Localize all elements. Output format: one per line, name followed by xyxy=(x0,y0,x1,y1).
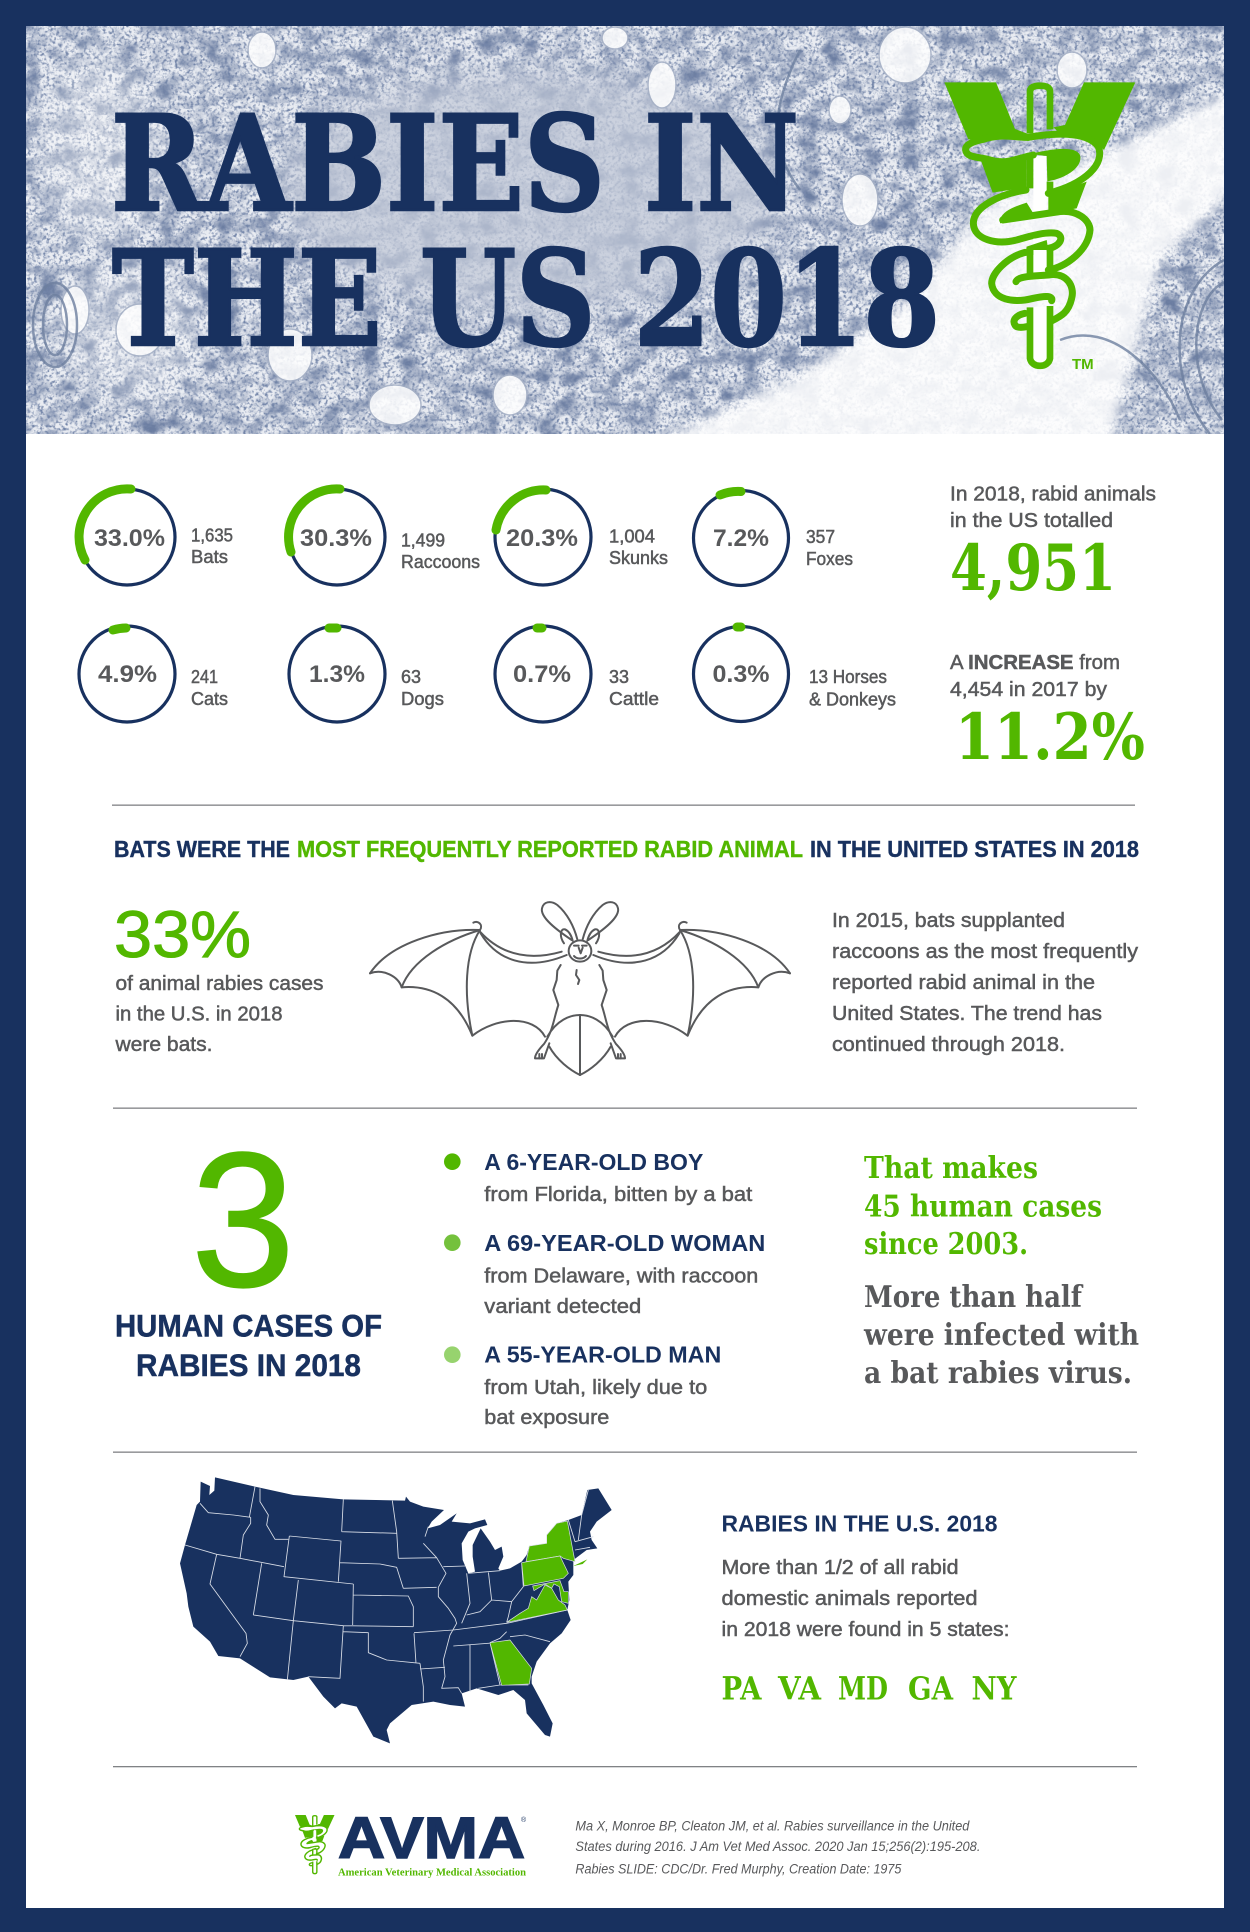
heading: bats most frequently reported: IN THE UNITED STATES IN 2018 xyxy=(810,836,1139,862)
case: 55-year-old man xyxy=(444,1342,721,1429)
stat: increase from 2017 xyxy=(950,651,1145,775)
chart: foxes donut: Foxes xyxy=(806,549,853,569)
stat: total rabid animals: In 2018, rabid animals xyxy=(950,482,1156,506)
list: human cases xyxy=(444,1149,765,1429)
chart: skunks donut: 20.3% xyxy=(506,525,578,552)
title xyxy=(111,87,940,377)
case: 6-year-old boy: from Florida, bitten by a bat xyxy=(484,1183,753,1206)
case: 55-year-old man: from Utah, likely due to xyxy=(484,1376,707,1399)
chart: raccoons donut: 1,499 xyxy=(401,530,445,550)
text: bats supplanted raccoons xyxy=(832,909,1139,1056)
highlighted state: Virginia xyxy=(507,1585,567,1622)
stat: increase from 2017: 4,454 in 2017 by xyxy=(950,678,1108,701)
text: more than half bat virus: were infected with xyxy=(863,1318,1139,1353)
text: bats supplanted raccoons: continued through 2018. xyxy=(832,1033,1065,1056)
case: 55-year-old man: bat exposure xyxy=(484,1406,609,1429)
text: 45 human cases since 2003 xyxy=(864,1151,1102,1262)
stat: 3 human cases: HUMAN CASES OF xyxy=(115,1308,382,1344)
text: bats supplanted raccoons: raccoons as the most frequently xyxy=(832,940,1139,963)
highlighted state: Pennsylvania xyxy=(522,1556,568,1586)
list: five state abbreviations: GA xyxy=(908,1669,954,1707)
text: domestic animals in 5 states: More than 1/2 of all rabid xyxy=(722,1556,958,1579)
panel: header micrograph background xyxy=(26,26,1235,445)
chart: horses and donkeys donut: & Donkeys xyxy=(809,690,896,710)
highlighted state: Georgia xyxy=(490,1640,532,1685)
text: domestic animals in 5 states xyxy=(722,1556,1010,1641)
chart: raccoons donut xyxy=(289,489,480,585)
chart: dogs donut: 63 xyxy=(401,667,421,687)
stat: increase from 2017: 11.2% xyxy=(955,700,1145,775)
highlighted state: New York xyxy=(526,1521,575,1562)
case: 69-year-old woman: variant detected xyxy=(484,1295,641,1318)
chart: dogs donut: 1.3% xyxy=(309,661,365,688)
stat: 3 human cases: 3 xyxy=(191,1112,295,1327)
chart: foxes donut: 357 xyxy=(806,527,835,547)
text: 45 human cases since 2003: 45 human cases xyxy=(864,1190,1102,1224)
highlighted state: Long Island xyxy=(573,1559,587,1566)
stat: 33 percent of cases: 33% xyxy=(114,897,251,971)
text: references: States during 2016. J Am Vet Med Assoc. 2020 Jan 15;256(2):195-208. xyxy=(575,1839,980,1854)
chart: skunks donut: 1,004 xyxy=(609,526,655,546)
text: domestic animals in 5 states: domestic animals reported xyxy=(722,1587,978,1610)
logo: AVMA: American Veterinary Medical Association xyxy=(338,1868,526,1878)
chart: dogs donut: Dogs xyxy=(401,689,444,709)
chart: foxes donut: 7.2% xyxy=(713,525,769,552)
chart: cats donut: 241 xyxy=(191,667,218,687)
chart: cats donut: 4.9% xyxy=(98,661,157,688)
case: 69-year-old woman xyxy=(444,1230,765,1318)
text: bats supplanted raccoons: United States. The trend has xyxy=(832,1002,1102,1025)
stat: increase from 2017: A INCREASE from xyxy=(950,651,1120,674)
stat: total rabid animals: in the US totalled xyxy=(950,509,1113,532)
stat: total rabid animals: 4,951 xyxy=(950,531,1116,606)
stat: 33 percent of cases xyxy=(114,897,324,1056)
case: 69-year-old woman: from Delaware, with raccoon xyxy=(484,1264,758,1288)
heading: bats most frequently reported xyxy=(114,836,1139,862)
stat: 33 percent of cases: were bats. xyxy=(114,1033,212,1056)
text: references: Rabies SLIDE: CDC/Dr. Fred Murphy, Creation Date: 1975 xyxy=(575,1861,902,1876)
text: references xyxy=(575,1819,980,1876)
chart: cats donut xyxy=(79,626,228,722)
chart: bats donut: 1,635 xyxy=(191,526,233,546)
title: RABIES IN xyxy=(111,87,799,242)
chart: skunks donut: Skunks xyxy=(609,548,668,568)
highlighted state: Maryland xyxy=(533,1581,568,1603)
chart: bats donut: Bats xyxy=(191,547,228,567)
chart: dogs donut xyxy=(289,626,444,722)
chart: horses and donkeys donut xyxy=(694,626,896,722)
stat: 33 percent of cases: of animal rabies cases xyxy=(116,972,324,995)
chart: cattle donut: 0.7% xyxy=(513,661,571,688)
list: five state abbreviations: PA xyxy=(722,1669,763,1707)
chart: cattle donut: Cattle xyxy=(609,689,659,709)
text: more than half bat virus xyxy=(863,1280,1139,1391)
case: 6-year-old boy: A 6-YEAR-OLD BOY xyxy=(484,1149,703,1175)
text: more than half bat virus: a bat rabies virus. xyxy=(864,1356,1132,1391)
trademark mark: TM xyxy=(1072,356,1094,373)
logo: AVMA: AVMA xyxy=(338,1806,525,1871)
chart: raccoons donut: Raccoons xyxy=(401,552,480,572)
text: domestic animals in 5 states: in 2018 were found in 5 states: xyxy=(722,1618,1010,1641)
chart: horses and donkeys donut: 0.3% xyxy=(712,661,770,688)
chart: foxes donut xyxy=(694,490,853,586)
chart: raccoons donut: 30.3% xyxy=(300,525,372,552)
heading: bats most frequently reported: MOST FREQUENTLY REPORTED RABID ANIMAL xyxy=(297,836,803,862)
icon: AVMA green V with staff and serpent xyxy=(944,82,1135,366)
text: more than half bat virus: More than half xyxy=(864,1280,1084,1315)
chart: cattle donut: 33 xyxy=(609,667,629,687)
list: five state abbreviations xyxy=(722,1669,1017,1707)
stat: total rabid animals xyxy=(950,482,1156,606)
chart: cats donut: Cats xyxy=(191,689,228,709)
title: THE US 2018 xyxy=(112,222,940,377)
stat: 33 percent of cases: in the U.S. in 2018 xyxy=(116,1002,282,1026)
chart: skunks donut xyxy=(495,489,668,585)
heading: bats most frequently reported: BATS WERE THE xyxy=(114,836,290,862)
text: 45 human cases since 2003: since 2003. xyxy=(864,1227,1028,1262)
list: five state abbreviations: NY xyxy=(972,1669,1017,1707)
list: five state abbreviations: VA xyxy=(777,1669,822,1707)
map: United States with highlighted states xyxy=(180,1477,612,1743)
chart: bats donut xyxy=(79,489,233,585)
list: five state abbreviations: MD xyxy=(838,1669,888,1707)
logo: AVMA xyxy=(295,1806,527,1878)
stat: 3 human cases: RABIES IN 2018 xyxy=(136,1347,361,1383)
icon: bat line drawing xyxy=(370,902,790,1075)
case: 6-year-old boy xyxy=(444,1149,753,1206)
case: 69-year-old woman: A 69-YEAR-OLD WOMAN xyxy=(484,1230,765,1256)
stat: 3 human cases xyxy=(115,1112,382,1383)
heading: rabies in the us 2018: RABIES IN THE U.S. 2018 xyxy=(722,1510,998,1536)
chart: bats donut: 33.0% xyxy=(94,525,165,552)
text: references: Ma X, Monroe BP, Cleaton JM, et al. Rabies surveillance in the United xyxy=(575,1819,970,1834)
text: 45 human cases since 2003: That makes xyxy=(864,1151,1038,1186)
chart: cattle donut xyxy=(495,626,659,722)
logo: AVMA: ® xyxy=(521,1816,527,1824)
case: 55-year-old man: A 55-YEAR-OLD MAN xyxy=(484,1342,721,1368)
chart: horses and donkeys donut: 13 Horses xyxy=(809,667,887,687)
text: bats supplanted raccoons: In 2015, bats supplanted xyxy=(832,909,1065,932)
text: bats supplanted raccoons: reported rabid animal in the xyxy=(832,971,1095,994)
